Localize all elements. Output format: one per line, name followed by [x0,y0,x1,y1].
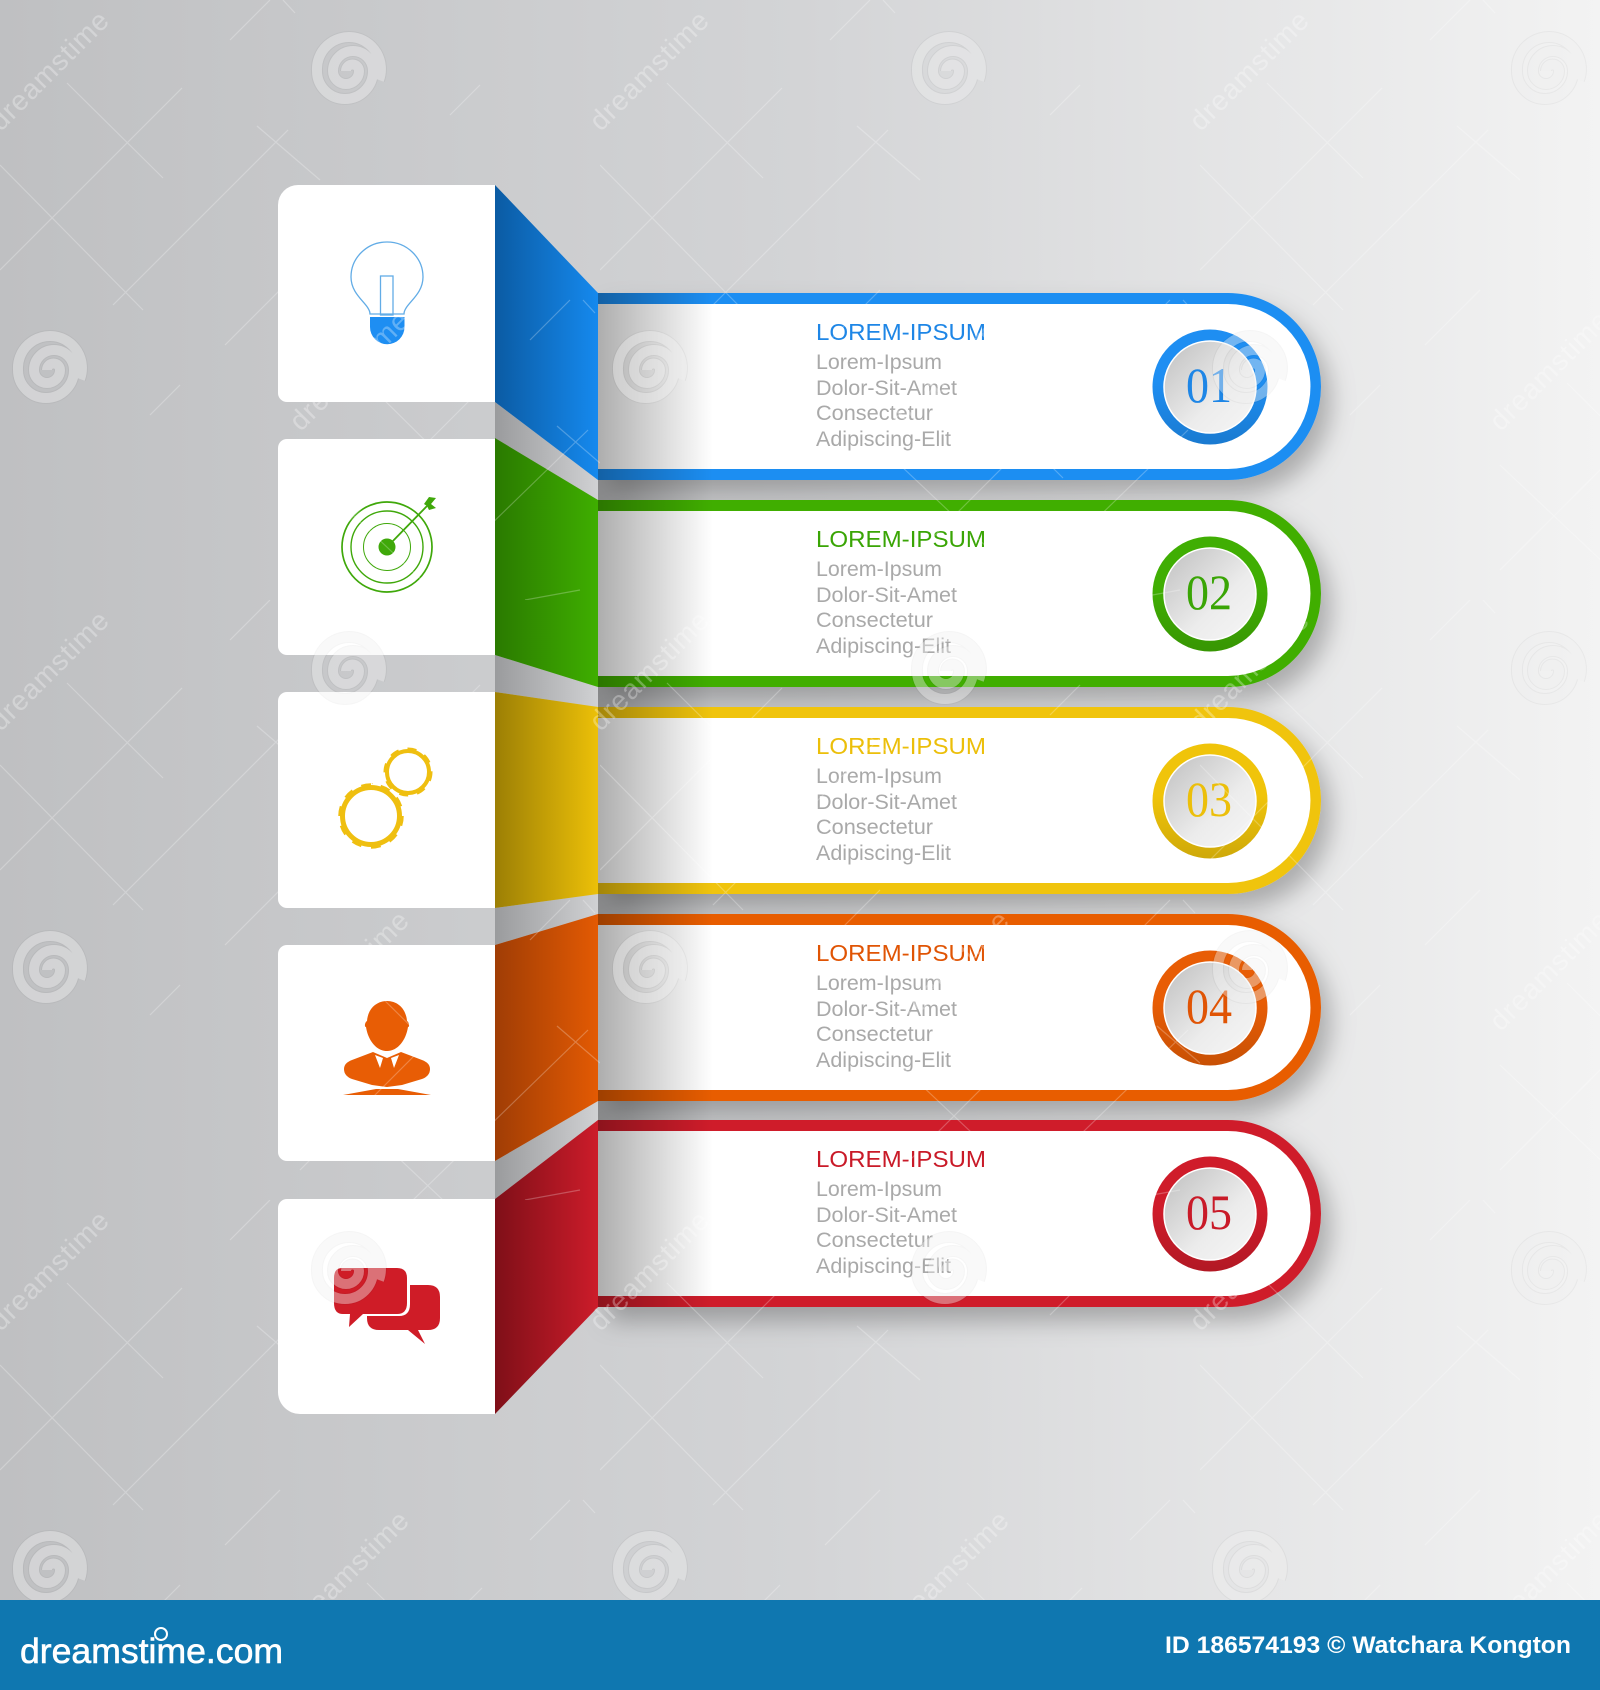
text block 04: Lorem-Ipsum [816,972,942,995]
card 1 [278,185,495,402]
watermark overlay: dreamstime [283,904,415,1036]
fold panel: orange [495,914,598,1161]
watermark overlay: dreamstime [283,1504,415,1636]
text block 01: Lorem-Ipsum [816,351,942,374]
text block 02: Consectetur [816,609,933,632]
watermark overlay: dreamstime [883,304,1015,436]
heading 05: LOREM-IPSUM [816,1146,986,1172]
text block 01: Adipiscing-Elit [816,428,951,451]
icon: gears [340,749,431,847]
card 3 [278,692,495,908]
watermark overlay: dreamstime [583,4,715,136]
text block 03: Consectetur [816,816,933,839]
fold panel: grey gaps [495,402,598,1199]
number badge 04 [1152,950,1268,1066]
text block 04: Adipiscing-Elit [816,1049,951,1072]
heading 03: LOREM-IPSUM [816,733,986,759]
number badge 02 [1152,536,1268,652]
number badge 02: 02 [1186,564,1232,620]
fold panel: red [495,1120,598,1414]
icon: target with arrow [342,497,436,592]
watermark overlay: dreamstime [1183,4,1315,136]
icon: light bulb [351,242,423,344]
footer logo: dreamstime.com [20,1632,283,1671]
number badge 05: 05 [1186,1184,1232,1240]
icon: person in suit [343,1001,431,1095]
text block 03: Dolor-Sit-Amet [816,791,957,814]
footer bar [0,1600,1600,1690]
fold panel: yellow [495,692,598,908]
text block 05: Dolor-Sit-Amet [816,1204,957,1227]
text block 01 [816,351,957,451]
heading 04: LOREM-IPSUM [816,940,986,966]
text block 04: Dolor-Sit-Amet [816,998,957,1021]
card 4 [278,945,495,1161]
number badge 03 [1152,744,1268,858]
panel: pill 02 [598,500,1321,687]
icon: speech bubbles [332,1266,440,1344]
card 2 [278,439,495,655]
watermark overlay: dreamstime [1183,1204,1315,1336]
watermark overlay: dreamstime [583,604,715,736]
fold panel: blue [495,185,598,480]
text block 03: Lorem-Ipsum [816,765,942,788]
text block 02: Adipiscing-Elit [816,635,951,658]
number badge 01 [1152,330,1268,444]
text block 03 [816,765,957,865]
fold panel: green [495,438,598,687]
watermark overlay: dreamstime [883,1504,1015,1636]
watermark overlay: dreamstime [883,904,1015,1036]
watermark overlay: dreamstime [1183,604,1315,736]
text block 02 [816,558,957,658]
text block 05: Consectetur [816,1229,933,1252]
text block 05: Adipiscing-Elit [816,1255,951,1278]
heading 02: LOREM-IPSUM [816,526,986,552]
number badge 01: 01 [1186,357,1232,413]
text block 03: Adipiscing-Elit [816,842,951,865]
card 5 [278,1199,495,1414]
number badge 04: 04 [1186,978,1232,1034]
watermark overlay: dreamstime [283,304,415,436]
text block 02: Lorem-Ipsum [816,558,942,581]
footer credit: ID 186574193 © Watchara Kongton [1165,1632,1571,1659]
text block 01: Dolor-Sit-Amet [816,377,957,400]
watermark overlay: dreamstime [583,1204,715,1336]
text block 04: Consectetur [816,1023,933,1046]
number badge 03: 03 [1186,771,1232,827]
text block 05 [816,1178,957,1278]
heading 01: LOREM-IPSUM [816,319,986,345]
panel: pill 03 [598,707,1321,894]
panel: pill 05 [598,1120,1321,1307]
panel: pill 01 [598,293,1321,480]
panel: pill 04 [598,914,1321,1101]
text block 02: Dolor-Sit-Amet [816,584,957,607]
text block 04 [816,972,957,1072]
text block 01: Consectetur [816,402,933,425]
number badge 05 [1152,1156,1268,1272]
text block 05: Lorem-Ipsum [816,1178,942,1201]
